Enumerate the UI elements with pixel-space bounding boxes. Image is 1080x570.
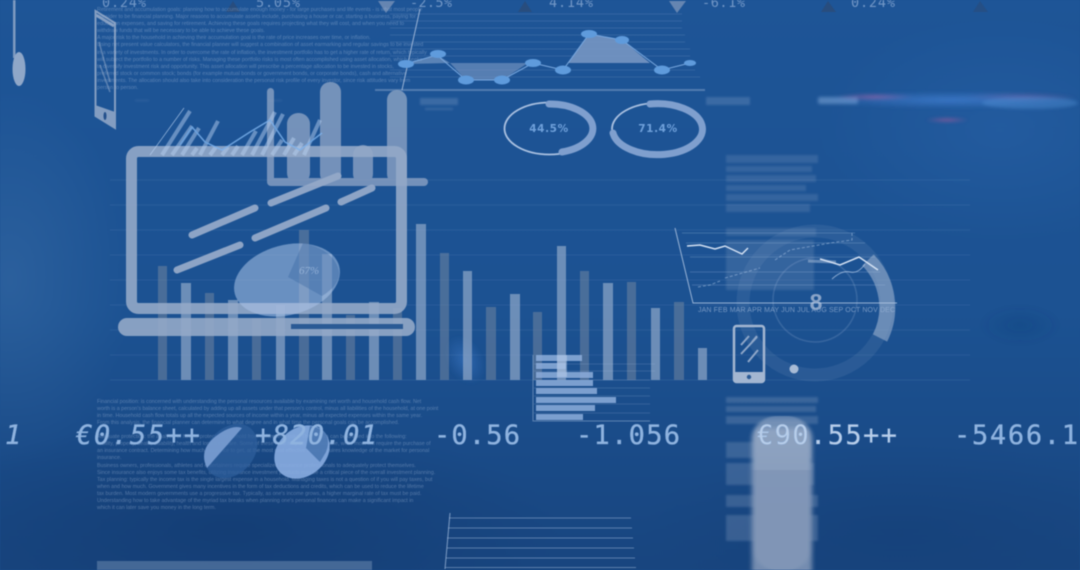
text block: top paragraph: person to person. — [97, 85, 138, 91]
line area chart — [375, 9, 705, 90]
line chart with months: JAN FEB MAR APR MAY JUN JUL AUG SEP OCT NOV DEC — [698, 307, 895, 314]
small empty chart bottom — [445, 513, 636, 569]
tall rounded bar — [752, 416, 812, 570]
ticker numbers: -1.056 — [576, 420, 680, 451]
text block: top paragraph: preferred stock or common stock; bonds (for example mutual bonds or government bonds, or corporate bonds), cash and alternative — [97, 71, 407, 77]
text block: bottom paragraph: tax burden. Most modern governments use a progressive tax. Typically, as one's income grows, a higher marginal rate of tax must be paid. — [97, 491, 421, 497]
text block: bottom paragraph — [97, 399, 439, 511]
donut chart 44.5% — [504, 102, 594, 154]
text block: top paragraph: investments. The allocation should also take into consideration the personal risk profile of every investor, since risk attitudes vary from — [97, 78, 411, 84]
lens flare — [436, 91, 1078, 392]
top ticker — [102, 0, 988, 13]
ticker numbers: 1 — [5, 420, 21, 451]
ticker numbers: +820.01 — [255, 420, 377, 451]
text block: bottom paragraph: Since insurance also enjoys some tax benefits, utilizing insurance investment products may be a critical piece of the overall investment planning. — [97, 470, 435, 476]
icon: laptop — [118, 152, 415, 336]
text block: top paragraph: consider to be financial planning. Major reasons to accumulate assets include, purchasing a house or car, starting a business, paying for — [97, 14, 416, 20]
text block: bottom paragraph: From this analysis, the financial planner can determine to what degree and in what time the personal goals can be accomplished. — [97, 420, 399, 426]
icon: bar chart behind laptop — [267, 82, 428, 186]
donut chart 71.4%: 71.4% — [638, 123, 678, 135]
text block: top paragraph — [97, 7, 427, 91]
pie chart with 67% — [226, 232, 348, 328]
ticker numbers: €0.55++ — [75, 420, 200, 451]
bar chart: vertical bars — [158, 224, 707, 380]
text block: bottom paragraph: when and how much. Government gives many incentives in the form of tax deductions and credits, which can be used to reduce the lifetime — [97, 484, 424, 490]
pie charts: pair of tilted pies — [194, 413, 340, 490]
text block: bottom paragraph: Financial position: is concerned with understanding the personal resources available by examining net worth and household cash flow. Net — [97, 399, 422, 405]
donut chart 44.5%: 44.5% — [529, 123, 569, 135]
text block: bottom paragraph: Tax planning: typically the income tax is the single largest expense in a household. Managing taxes is not a question of if you will pay taxes, but — [97, 477, 433, 483]
line chart with months — [675, 228, 897, 314]
text block: bottom paragraph: Business owners, professionals, athletes and entertainers require specialized insurance professionals to adequately protect themselves. — [97, 463, 416, 469]
text block: bottom paragraph: insurance. — [97, 455, 121, 461]
text block: top paragraph: A major risk to the household in achieving their accumulation goal is the rate of price increases over time, or inflation. — [97, 35, 371, 41]
bar chart: horizontal bars — [533, 355, 655, 421]
donut chart 71.4% — [612, 103, 704, 155]
text block: bottom paragraph: in time. Household cash flow totals up all the expected sources of income within a year, minus all expected expenses within the same year. — [97, 413, 422, 419]
icon: phone — [734, 326, 764, 382]
icon: music note — [12, 0, 26, 86]
ring gauge: 8 — [810, 289, 823, 315]
text block: top paragraph: withdraw funds that will be necessary to be able to achieve these goals. — [97, 28, 265, 34]
text block: top paragraph: education expenses, and saving for retirement. Achieving these goals requires projecting what they will cost, and when you need to — [97, 21, 404, 27]
ticker numbers: -0.56 — [434, 420, 520, 451]
small label dashes — [135, 97, 750, 110]
text block: bottom paragraph: worth is a person's balance sheet, calculated by adding up all assets under that person's control, minus all liabilities of the household, at one point — [97, 406, 439, 412]
text block: bottom paragraph: Adequate protection: the analysis of how to protect a household from unforeseen risks. These risks can be divided into the following: — [97, 434, 407, 440]
ring gauge — [743, 231, 887, 375]
text block: top paragraph: will subject the portfolio to a number of risks. Managing these portfolio risks is most often accomplished using asset allocation, which seeks — [97, 57, 423, 63]
stripes chart over laptop — [150, 108, 322, 155]
text block: bottom paragraph: liability, property, death, disability, health and long term care. Some of these risks may be self-insurable, while most will require the purchase of — [97, 441, 431, 447]
icon: tilted phone — [95, 11, 115, 128]
text block: top paragraph: Using net present value calculators, the financial planner will suggest a combination of asset earmarking and regular savings to be invested — [97, 42, 423, 48]
ticker numbers — [5, 420, 1078, 451]
text block: top paragraph: in a variety of investments. In order to overcome the rate of inflation, the investment portfolio has to get a higher rate of return, which typically — [97, 50, 427, 56]
text block: bottom paragraph: Understanding how to take advantage of the myriad tax breaks when planning one's personal finances can make a significant impact in — [97, 498, 413, 504]
blurred side text block: upper — [726, 155, 818, 290]
blurred side text block: lower — [726, 397, 818, 541]
horizontal grid lines — [110, 180, 970, 380]
bottom caption bar — [97, 561, 372, 570]
text block: bottom paragraph: which it can later save you money in the long term. — [97, 505, 216, 511]
pie chart with 67%: 67% — [299, 265, 319, 277]
text block: bottom paragraph: an insurance contract. Determining how much insurance to get, at the most cost effective terms requires knowledge of the market for personal — [97, 448, 429, 454]
ticker numbers: -5466.1 — [954, 420, 1078, 451]
ticker numbers: €90.55++ — [757, 420, 897, 451]
text block: top paragraph: Retirement and accumulation goals: planning how to accumulate enough money - for large purchases and life events - is what most people — [97, 7, 422, 13]
text block: top paragraph: to diversify investment risk and opportunity. This asset allocation will prescribe a percentage allocation to be invested in stocks, — [97, 64, 394, 70]
